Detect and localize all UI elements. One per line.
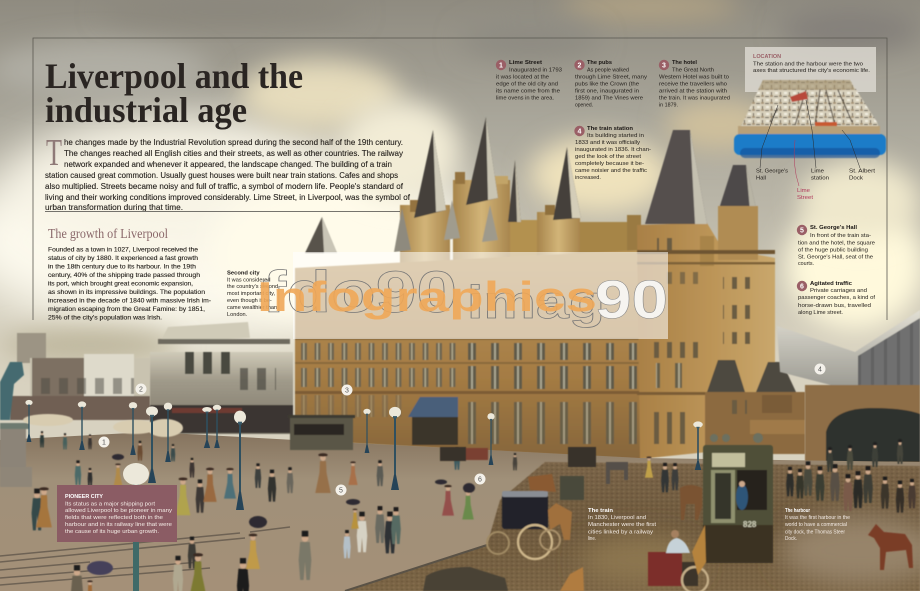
sculpture horses in the distance xyxy=(23,414,183,437)
callout 5: St. George's Hall: St. George's Hall, seat of the xyxy=(798,254,873,260)
callout 6: Agitated traffic: Agitated traffic xyxy=(810,281,853,287)
caption: the train: Manchester were the first xyxy=(588,522,657,528)
marker 1 xyxy=(98,436,110,448)
callout 5: St. George's Hall: of the huge public building xyxy=(798,248,868,254)
panel: location map xyxy=(734,47,886,201)
section: the growth of Liverpool: Founded as a town in 1027, Liverpool received the xyxy=(48,246,198,254)
caption: the harbour xyxy=(784,508,850,542)
callout 1: Lime Street: it was located at the xyxy=(496,74,549,80)
callout 5: St. George's Hall xyxy=(797,225,875,267)
callout 4: The train station: Its building started in xyxy=(587,133,644,139)
intro text: network expanded and whenever it appeared, the landscape changed. The building of a train xyxy=(64,159,392,169)
left distant buildings xyxy=(10,333,150,420)
callout 3: The hotel: The hotel xyxy=(672,60,697,66)
callout 4: The train station: 1833 and it was officially xyxy=(575,140,640,146)
section: the growth of Liverpool: increased in the decade of 1840 with massive Irish im- xyxy=(48,297,211,304)
text: second city: London. xyxy=(227,312,248,318)
dark carriage xyxy=(487,474,584,559)
callout 4: The train station: 4 xyxy=(578,128,582,136)
callout 3: The hotel: The Great North xyxy=(672,68,714,74)
steps xyxy=(0,527,290,585)
callout 1: Lime Street: edge of the old city and xyxy=(496,82,558,88)
tram number 828: 828 xyxy=(743,520,757,529)
panel: pioneer city: Its status as a major shipping port xyxy=(65,502,156,508)
panel: pioneer city: fields that were reflected both in the xyxy=(65,515,163,521)
horse-drawn tram at left xyxy=(288,415,355,450)
watermark: fdo90 xyxy=(262,260,457,325)
marker 5 xyxy=(336,484,346,496)
callout 1: Lime Street: lime ovens in the area. xyxy=(496,96,554,102)
callout 1: Lime Street: Inaugurated in 1793 xyxy=(509,68,562,74)
panel: location map: Lime xyxy=(797,188,810,194)
title: Liverpool and the xyxy=(45,56,303,96)
caption: the train xyxy=(588,508,657,542)
marker 4 xyxy=(814,364,826,374)
caption: the train: line. xyxy=(588,536,596,542)
callout 3: The hotel xyxy=(659,60,730,108)
callout 6: Agitated traffic: Private carriages and xyxy=(810,288,867,294)
section: the growth of Liverpool: in the 18th century due to its harbour. In the 19th xyxy=(48,264,196,270)
intro text: he changes made by the Industrial Revolution spread during the second half of the 19th century. xyxy=(64,137,403,147)
callout 4: The train station: ged the look of the street xyxy=(575,154,641,160)
marker 4: 4 xyxy=(818,366,822,374)
cobbled street xyxy=(345,462,920,591)
section: the growth of Liverpool: migration escaping from the Great Famine: by 1851, xyxy=(48,306,205,313)
callout 2: The pubs: opened. xyxy=(575,102,593,108)
callout 6: Agitated traffic xyxy=(797,281,875,316)
panel: pioneer city: the cause of its huge urban growth. xyxy=(65,529,160,535)
callout 3: The hotel: Western Hotel was built to xyxy=(659,74,729,80)
umbrellas xyxy=(87,454,475,575)
marker 3 xyxy=(342,384,352,396)
callout 5: St. George's Hall: courts. xyxy=(798,261,814,267)
marker 6 xyxy=(474,474,486,484)
callout 5: St. George's Hall: tion and the hotel, the square xyxy=(798,240,875,246)
facade window rows xyxy=(295,338,640,444)
title: industrial age xyxy=(45,90,247,130)
callout 4: The train station: completely because it be- xyxy=(575,161,644,167)
rear gold blocks xyxy=(400,172,641,265)
frame line xyxy=(33,38,887,320)
section: the growth of Liverpool: as shown in its impressive buildings. The population xyxy=(48,289,205,296)
foreground lamp xyxy=(123,463,149,591)
carriages and horses xyxy=(423,433,913,591)
callout 6: Agitated traffic: passenger coaches, a kind of xyxy=(798,295,875,301)
callout 2: The pubs: 2 xyxy=(578,62,582,70)
marker 5: 5 xyxy=(339,488,343,494)
caption: the train: The train xyxy=(588,508,614,514)
callout 4: The train station: came noisier and the traffic xyxy=(575,168,647,174)
marker 2: 2 xyxy=(139,386,143,394)
intro text: living and their working conditions improved considerably. Lime Street, in Liverpool, was the symbol of xyxy=(45,192,411,202)
callout 2: The pubs xyxy=(574,60,647,108)
callout 2: The pubs: first one, inaugurated in xyxy=(575,88,639,94)
intro text: The changes reached all English cities and their streets, as well as other countries. The railway xyxy=(64,148,404,158)
tram number 828 xyxy=(703,433,773,563)
text: second city: It was considered xyxy=(227,278,271,284)
watermark: imag xyxy=(467,276,605,328)
callout 3: The hotel: the train. It was inaugurated xyxy=(659,96,730,102)
right main tower xyxy=(637,130,805,459)
callout 6: Agitated traffic: along Lime street. xyxy=(798,310,843,316)
panel: location map: station xyxy=(811,176,829,182)
marker 6: 6 xyxy=(478,476,482,484)
entrance canopy xyxy=(408,397,458,445)
panel: location map: Lime xyxy=(811,168,824,174)
watermark xyxy=(257,252,668,339)
callout 2: The pubs: The pubs xyxy=(587,60,612,66)
callout 5: St. George's Hall: In front of the train sta- xyxy=(810,233,871,239)
main hotel building xyxy=(295,117,805,459)
lower right roofs and wing xyxy=(707,360,745,392)
panel: pioneer city: harbour and in its railway line that were xyxy=(65,522,172,528)
watermark: 90 xyxy=(595,270,668,330)
callout 3: The hotel: receive the travellers who xyxy=(659,82,727,88)
marker 2 xyxy=(136,384,146,394)
text: second city: the country's second xyxy=(227,284,278,290)
crowd of people xyxy=(32,431,916,591)
section: the growth of Liverpool: its port, which brought great economic expansion, xyxy=(48,280,193,287)
intro text: urban transformation during that time. xyxy=(45,202,183,212)
panel: location map: The station and the harbour were the two xyxy=(753,62,863,68)
map leader lines xyxy=(760,100,860,186)
section: the growth of Liverpool: status of city by 1880. It experienced a fast growth xyxy=(48,255,198,262)
intro text: station caused great commotion. Usually guest houses were built near train stations. Cafes and shops xyxy=(45,170,398,180)
left small tower xyxy=(305,217,337,253)
map of the city xyxy=(734,80,886,158)
panel: pioneer city xyxy=(57,485,177,542)
callout 6: Agitated traffic: 6 xyxy=(800,284,804,290)
marker 1: 1 xyxy=(102,440,106,446)
section: the growth of Liverpool: century, 40% of the shipping trade passed through xyxy=(48,272,200,279)
callout 1: Lime Street xyxy=(496,60,562,102)
ground: Lime Street square xyxy=(0,432,920,591)
callout 2: The pubs: 1859) and The Vines were xyxy=(575,96,643,102)
panel: location map: St. Albert xyxy=(849,168,876,174)
left classical building xyxy=(150,322,293,434)
callout 5: St. George's Hall: 5 xyxy=(800,228,804,234)
caption: the harbour: world to have a commercial xyxy=(784,522,847,528)
panel: location map: axes that structured the city's economic life. xyxy=(753,68,870,74)
text: second city: came wealthier than xyxy=(227,305,277,311)
caption: the harbour: city dock, the Thomas Steer xyxy=(785,530,845,536)
callout 3: The hotel: 3 xyxy=(662,62,666,70)
callout 1: Lime Street: its name come from the xyxy=(496,88,560,94)
callout 4: The train station: inaugurated in 1836. It chan- xyxy=(575,147,651,153)
intro text: also multiplied. Streets became noisy and full of traffic, a symbol of modern life. People's standard of xyxy=(45,181,404,191)
scene markers xyxy=(98,364,826,496)
caption: the harbour: It was the first harbour in the xyxy=(785,515,850,521)
panel: pioneer city: allowed Liverpool to be pioneer in many xyxy=(65,508,172,514)
railway station xyxy=(777,310,920,465)
panel: location map: Dock xyxy=(849,176,863,182)
street lamps xyxy=(25,400,703,591)
panel: location map: Street xyxy=(797,195,813,201)
callout 2: The pubs: pubs like the Crown (the xyxy=(575,82,639,88)
section: the growth of Liverpool xyxy=(48,227,211,321)
title xyxy=(45,56,303,130)
callout 3: The hotel: in 1879. xyxy=(659,102,678,108)
panel: pioneer city: PIONEER CITY xyxy=(65,494,103,500)
panel: location map: St. George's xyxy=(756,168,788,174)
callout 5: St. George's Hall: St. George's Hall xyxy=(810,225,857,231)
section: the growth of Liverpool: The growth of Liverpool xyxy=(48,227,168,242)
statue monument xyxy=(0,362,32,487)
callout 2: The pubs: As people walked xyxy=(587,68,629,74)
motor car roof at bottom xyxy=(423,567,508,591)
drop cap: T xyxy=(46,132,62,174)
red cart and driver xyxy=(648,525,708,591)
front facade xyxy=(295,250,640,459)
text: second city: most important city, xyxy=(227,291,276,297)
marker 3: 3 xyxy=(345,388,349,394)
text: second city: even though it be- xyxy=(227,298,272,304)
callout 2: The pubs: through Lime Street, many xyxy=(575,74,647,80)
caption: the harbour: The harbour xyxy=(785,508,811,514)
distant carts xyxy=(440,447,596,467)
callout 4: The train station xyxy=(574,126,651,181)
horses xyxy=(466,448,913,591)
caption: the train: cities linked by a railway xyxy=(588,530,653,536)
watermark: Infographics xyxy=(257,273,597,320)
caption: the harbour: Dock. xyxy=(785,536,797,542)
caption: the train: In 1830, Liverpool and xyxy=(588,515,646,521)
text: second city: Second city xyxy=(227,270,260,276)
intro text xyxy=(45,132,411,212)
spires xyxy=(394,117,581,252)
callout 4: The train station: increased. xyxy=(575,175,601,181)
callout 6: Agitated traffic: horse-drawn bus, travelled xyxy=(798,303,871,309)
callout 1: Lime Street: Lime Street xyxy=(509,60,542,66)
text: second city xyxy=(227,270,278,318)
callout 3: The hotel: arrived at the station with xyxy=(659,88,727,94)
panel: location map: Hall xyxy=(756,176,766,182)
callout 1: Lime Street: 1 xyxy=(499,62,503,70)
panel: location map: LOCATION xyxy=(753,54,781,60)
tower slate roofs xyxy=(645,130,707,224)
section: the growth of Liverpool: 25% of the city's population was Irish. xyxy=(48,314,162,321)
callout 4: The train station: The train station xyxy=(587,126,633,132)
